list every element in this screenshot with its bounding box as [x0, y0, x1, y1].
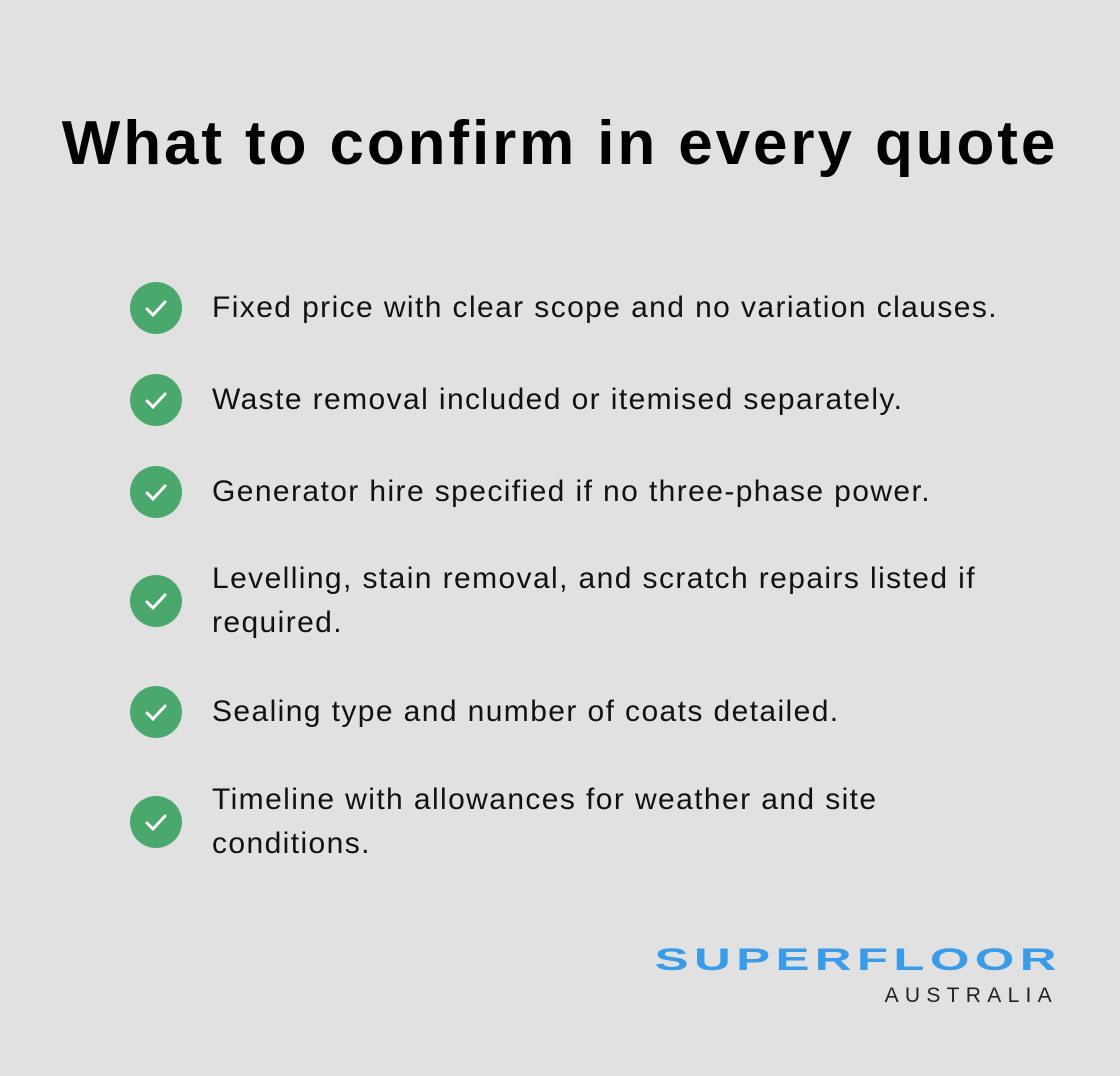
item 3	[130, 466, 931, 518]
icon: check	[130, 796, 182, 848]
item 4: Levelling, stain removal, and scratch repairs listed if required.	[212, 562, 976, 639]
item 2	[130, 374, 903, 426]
icon: check	[130, 374, 182, 426]
title: What to confirm in every quote	[62, 109, 1058, 178]
item 1: Fixed price with clear scope and no variation clauses.	[212, 291, 998, 324]
item 3: Generator hire specified if no three-phase power.	[212, 475, 931, 508]
logo: AUSTRALIA	[885, 984, 1058, 1007]
item 6: Timeline with allowances for weather and site conditions.	[212, 783, 878, 860]
logo	[655, 943, 1062, 1007]
logo: SUPERFLOOR	[655, 943, 1062, 978]
icon: check	[130, 575, 182, 627]
icon: check	[130, 282, 182, 334]
item 2: Waste removal included or itemised separately.	[212, 383, 903, 416]
icon: check	[130, 466, 182, 518]
icon: check	[130, 686, 182, 738]
item 5	[130, 686, 840, 738]
item 5: Sealing type and number of coats detailed.	[212, 695, 840, 728]
item 1	[130, 282, 998, 334]
